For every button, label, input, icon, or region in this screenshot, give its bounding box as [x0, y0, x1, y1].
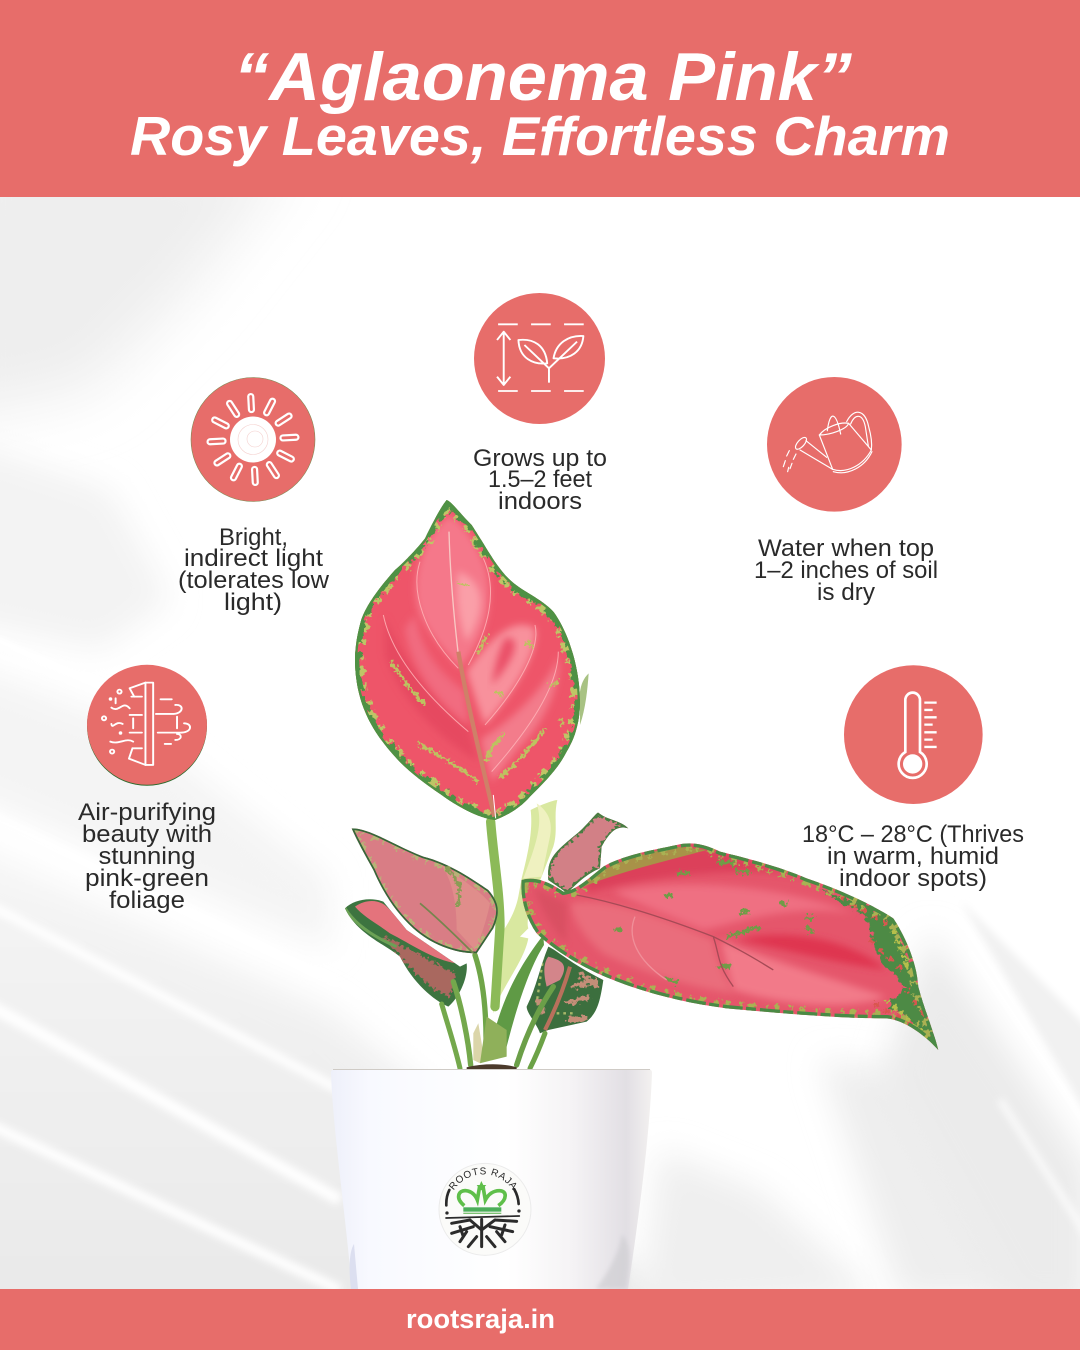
- icon: plant height: [474, 293, 605, 424]
- icon: thermometer: [844, 665, 983, 804]
- text: light: Bright,: [219, 524, 288, 551]
- icon: sun: [191, 378, 315, 502]
- header band: [0, 0, 1080, 197]
- text: light: [178, 524, 330, 616]
- lower dark leaf: [527, 947, 603, 1033]
- text: air purifying: stunning: [98, 843, 196, 870]
- icon: air purifying: [87, 665, 207, 786]
- logo roots: [446, 1216, 519, 1247]
- text: temperature: in warm, humid: [827, 843, 999, 870]
- text: water: is dry: [817, 579, 875, 606]
- text: light: (tolerates low: [178, 567, 330, 594]
- icon: watering can: [767, 377, 902, 512]
- text: temperature: indoor spots): [839, 865, 987, 892]
- text: height: Grows up to: [473, 445, 607, 472]
- text: temperature: [802, 821, 1024, 892]
- lower foliage and stems: [345, 800, 628, 1071]
- text: water: 1–2 inches of soil: [754, 557, 938, 584]
- text: air purifying: [78, 799, 216, 914]
- footer url: rootsraja.in: [406, 1304, 555, 1334]
- shoot base: [467, 935, 544, 1071]
- text: air purifying: foliage: [109, 887, 185, 914]
- logo sticker: [438, 1163, 532, 1256]
- stems: [442, 822, 553, 1068]
- text: water: [754, 535, 938, 606]
- text: temperature: 18°C – 28°C (Thrives: [802, 821, 1024, 848]
- subtitle: Rosy Leaves, Effortless Charm: [130, 105, 950, 167]
- main upright leaf: [355, 500, 589, 820]
- logo wordmark: ROOTS RAJA: [448, 1167, 516, 1190]
- footer band: [0, 1289, 1080, 1350]
- small upper leaf: [548, 813, 628, 893]
- pale sheath: [493, 800, 557, 1013]
- text: height: [473, 445, 607, 515]
- text: air purifying: pink-green: [85, 865, 209, 892]
- text: light: light): [224, 589, 282, 616]
- small left leaf: [352, 828, 498, 955]
- text: light: indirect light: [184, 545, 323, 572]
- back left leaf: [345, 899, 467, 1007]
- text: air purifying: Air-purifying: [78, 799, 216, 826]
- text: height: 1.5–2 feet: [488, 466, 592, 493]
- big right leaf: [521, 843, 938, 1050]
- text: height: indoors: [498, 488, 582, 515]
- logo crown: [459, 1181, 505, 1214]
- title: “Aglaonema Pink”: [234, 39, 852, 115]
- plant: [345, 500, 938, 1071]
- text: water: Water when top: [758, 535, 934, 562]
- text: air purifying: beauty with: [82, 821, 212, 848]
- white pot: [331, 1069, 652, 1289]
